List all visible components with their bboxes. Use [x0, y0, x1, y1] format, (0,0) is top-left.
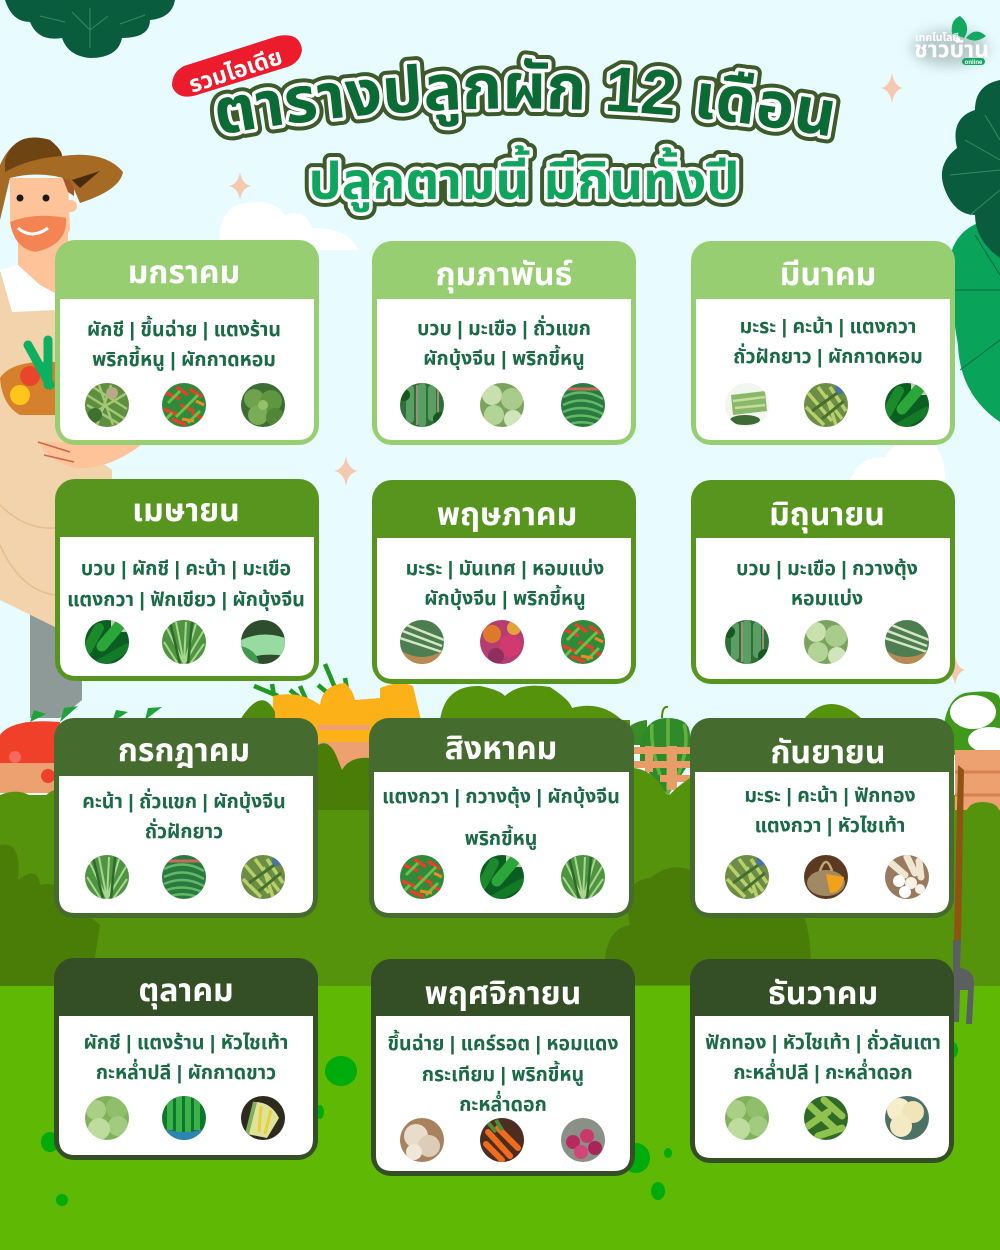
farmer body and apron	[0, 255, 112, 640]
vegetable photos	[400, 1118, 605, 1162]
top leaf	[5, 0, 175, 58]
vegetable list: มะระ | คะน้า | แตงกวา	[740, 316, 916, 338]
vegetable list: ถั่วฝักยาว | ผักกาดหอม	[733, 343, 923, 368]
vegetable list	[733, 316, 923, 368]
title line 1: ตารางปลูกผัก 12 เดือน	[217, 58, 833, 136]
right leaves	[942, 80, 1000, 422]
vegetable list: กะหล่ำปลี | กะหล่ำดอก	[733, 1058, 913, 1084]
farmer shirt	[0, 265, 58, 312]
panel: December	[690, 959, 954, 1163]
vegetable list	[67, 558, 305, 611]
vegetable list: บวบ | มะเขือ | ถั่วแขก	[417, 315, 591, 340]
farmer arm and hand	[38, 442, 145, 468]
vegetable list: ผักบุ้งจีน | พริกขี้หนู	[424, 584, 586, 610]
panel: March	[691, 241, 955, 445]
vegetable list	[417, 315, 591, 370]
title tag: รวมไอเดีย	[186, 43, 285, 98]
vegetable photos	[398, 383, 605, 428]
vegetable list: พริกขี้หนู	[465, 824, 537, 850]
vegetable list: กะหล่ำดอก	[459, 1090, 547, 1116]
vegetable photos	[725, 1096, 929, 1140]
farmer face	[10, 178, 70, 252]
vegetable list	[736, 558, 918, 610]
cloud left	[220, 202, 358, 250]
farmer eyes	[16, 194, 24, 202]
month heading: มิถุนายน	[769, 496, 885, 533]
month heading: เมษายน	[132, 492, 240, 528]
tomato crate	[0, 706, 162, 793]
panel: August	[369, 718, 634, 918]
vegetable photos	[85, 855, 285, 899]
vegetable list: แตงกวา | หัวไชเท้า	[755, 815, 905, 837]
vegetable list: กะหล่ำปลี | ผักกาดขาว	[96, 1058, 276, 1084]
vegetable list: ถั่วฝักยาว	[145, 818, 223, 843]
vegetable photos	[725, 383, 929, 427]
vegetable list: หอมแบ่ง	[791, 588, 863, 610]
vegetable list: กระเทียม | พริกขี้หนู	[422, 1060, 584, 1086]
vegetable list: ผักบุ้งจีน | พริกขี้หนู	[423, 344, 585, 370]
carrots crate	[240, 664, 421, 777]
vegetable list: พริกขี้หนู | ผักกาดหอม	[92, 345, 276, 371]
vegetable photos	[400, 855, 605, 899]
month heading: มกราคม	[128, 254, 240, 290]
month heading: ธันวาคม	[768, 975, 878, 1011]
watermelon and fence	[617, 707, 690, 800]
vegetable list: ผักชี | แตงร้าน | หัวไชเท้า	[84, 1032, 288, 1054]
month heading: ตุลาคม	[138, 972, 234, 1009]
logo: เทคโนโลยี	[915, 32, 959, 44]
vegetable photos	[85, 620, 285, 664]
month heading: กันยายน	[770, 734, 886, 770]
vegetable photos	[85, 1096, 285, 1140]
vegetable photos	[723, 620, 929, 665]
month heading: สิงหาคม	[445, 730, 557, 766]
vegetable list: ฟักทอง | หัวไชเท้า | ถั่วลันเตา	[705, 1029, 941, 1054]
title line 2: ปลูกตามนี้ มีกินทั้งปี	[309, 145, 739, 213]
logo	[912, 16, 989, 66]
cloud right	[850, 439, 945, 480]
central bush	[380, 686, 630, 800]
vegetable list: มะระ | มันเทศ | หอมแบ่ง	[406, 558, 604, 580]
vegetable list: แตงกวา | กวางตุ้ง | ผักบุ้งจีน	[382, 786, 620, 808]
panel: May	[372, 480, 636, 684]
vegetable list	[387, 1029, 619, 1116]
vegetable list: มะระ | คะน้า | ฟักทอง	[744, 785, 916, 807]
vegetable list: บวบ | ผักชี | คะน้า | มะเขือ	[81, 558, 291, 580]
foreground dark bushes	[604, 867, 811, 985]
panel: January	[55, 240, 319, 445]
month heading: กุมภาพันธ์	[436, 256, 573, 293]
vegetable list	[87, 315, 281, 371]
title tag	[172, 35, 302, 98]
farmer basket	[0, 362, 55, 415]
pitchfork	[953, 765, 974, 1024]
distant right bush	[803, 704, 863, 720]
cauliflower crate	[943, 692, 1000, 990]
month heading: พฤศจิกายน	[425, 975, 581, 1011]
vegetable list	[82, 788, 286, 843]
panel: September	[690, 718, 954, 918]
vegetable photos	[725, 855, 929, 899]
month heading: กรกฎาคม	[118, 732, 250, 768]
panel: April	[55, 479, 319, 681]
title line 1: ตารางปลูกผัก 12 เดือน	[210, 50, 840, 144]
farmer beard	[10, 216, 66, 252]
farmer	[0, 138, 145, 718]
panel: June	[691, 480, 955, 684]
panel: October	[54, 958, 318, 1160]
left bushes	[0, 743, 370, 990]
sparkle stars	[229, 73, 965, 685]
vegetable list: บวบ | มะเขือ | กวางตุ้ง	[736, 558, 918, 580]
month heading: มีนาคม	[780, 256, 876, 292]
panel: February	[372, 241, 636, 445]
title line 2: ปลูกตามนี้ มีกินทั้งปี	[309, 145, 739, 213]
vegetable photos	[85, 383, 285, 427]
panel: November	[371, 959, 635, 1176]
grass spots	[41, 1042, 958, 1206]
logo: ชาวบ้าน	[914, 36, 989, 62]
logo: online	[965, 60, 983, 66]
title line 2: ปลูกตามนี้ มีกินทั้งปี	[309, 145, 739, 213]
panel: July	[54, 718, 318, 918]
vegetable list: แตงกวา | ฟักเขียว | ผักบุ้งจีน	[67, 589, 305, 611]
vegetable list: คะน้า | ถั่วแขก | ผักบุ้งจีน	[82, 788, 286, 813]
title line 1: ตารางปลูกผัก 12 เดือน	[214, 54, 836, 140]
vegetable list: ผักชี | ขึ้นฉ่าย | แตงร้าน	[87, 315, 281, 341]
field ground	[0, 795, 1000, 990]
title	[172, 35, 840, 220]
vegetable list	[705, 1029, 941, 1084]
farmer trousers	[30, 615, 82, 718]
farmer neck	[18, 225, 68, 300]
month heading: พฤษภาคม	[437, 496, 577, 532]
vegetable list	[382, 786, 620, 850]
vegetable photos	[400, 620, 605, 664]
farmer hat	[0, 138, 123, 220]
vegetable list	[84, 1032, 288, 1084]
vegetable list: ขึ้นฉ่าย | แคร์รอต | หอมแดง	[387, 1029, 619, 1055]
vegetable list	[406, 558, 604, 610]
bright grass	[0, 986, 1000, 1250]
vegetable list	[744, 785, 916, 837]
